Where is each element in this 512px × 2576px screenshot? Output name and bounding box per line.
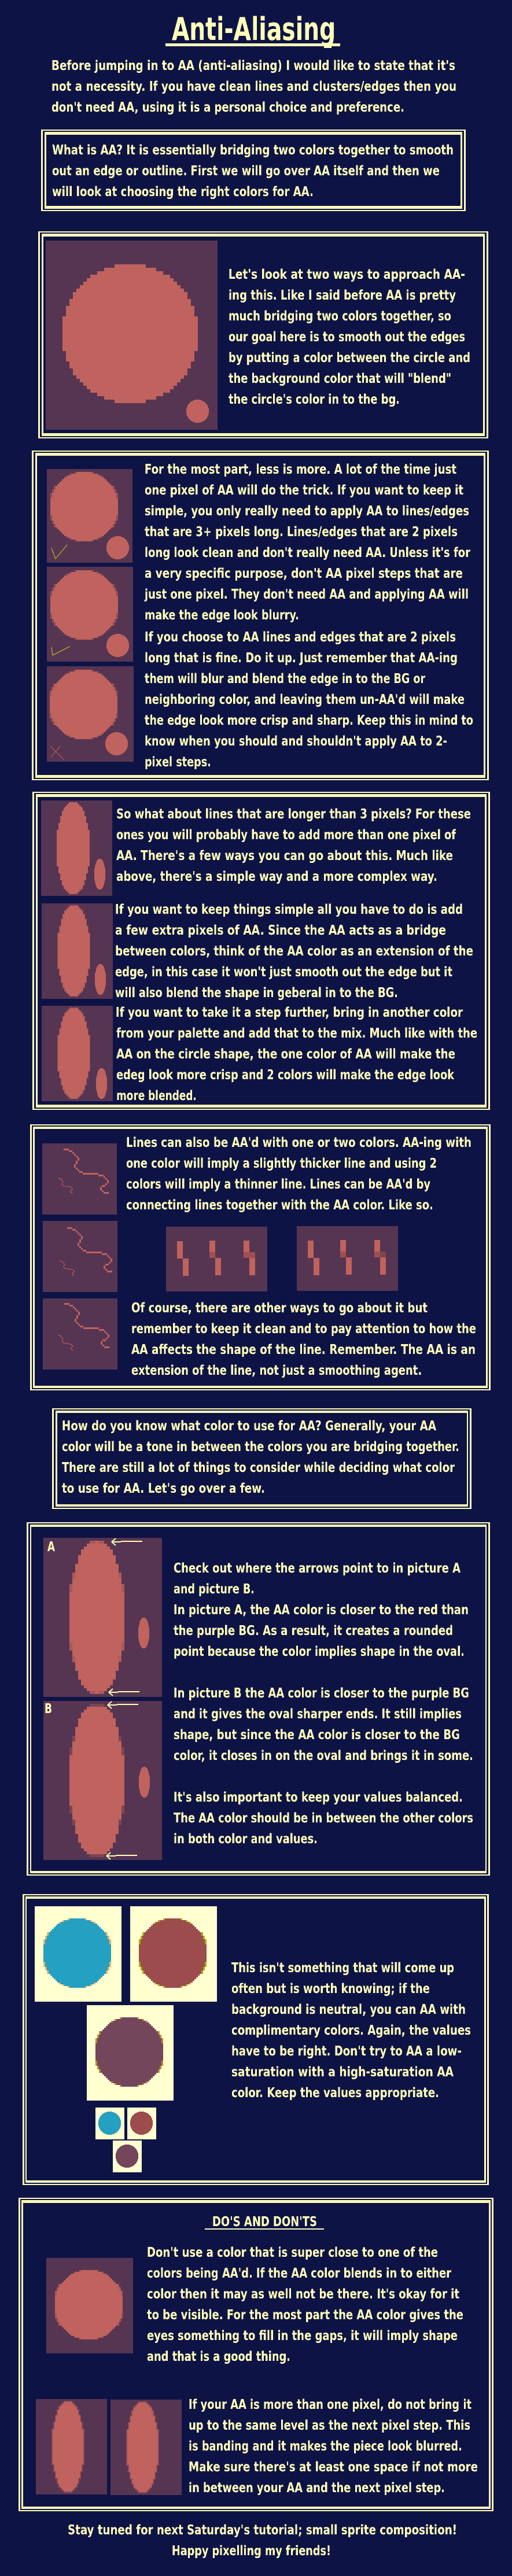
arrow: bottom of oval A bbox=[109, 1689, 139, 1696]
picture: red oval on cream bbox=[130, 1906, 217, 2002]
footer text bbox=[68, 2523, 457, 2559]
picture: AA too close to one color bbox=[46, 2258, 133, 2353]
text: simple approach bbox=[115, 902, 473, 1001]
text: two ways to approach AA: ing this. Like I said before AA is pretty bbox=[229, 288, 456, 303]
panel: lines longer than 3 pixels bbox=[32, 792, 490, 1110]
text: lines with AA bbox=[126, 1135, 472, 1213]
text: picture comparison: and picture B. bbox=[174, 1582, 255, 1597]
picture: squiggle lines with one AA color bbox=[43, 1221, 117, 1292]
text: complementary colors: saturation with a high-saturation AA bbox=[231, 2065, 454, 2080]
panel: choosing AA color bbox=[52, 1408, 472, 1509]
panel: two ways to approach AA bbox=[38, 231, 488, 438]
panel: what is AA bbox=[41, 130, 466, 211]
text: longer lines bbox=[116, 807, 471, 884]
text: simple approach: a few extra pixels of AA. Since the AA acts as a bridge bbox=[115, 923, 446, 938]
picture: teal oval on cream bbox=[35, 1906, 121, 2002]
mini sprite: plum bbox=[113, 2140, 142, 2172]
panel: AA on lines bbox=[30, 1124, 491, 1390]
picture B: AA closer to purple bbox=[43, 1701, 162, 1860]
text: banding: in between your AA and the next pixel step. bbox=[189, 2481, 445, 2496]
text: complementary colors: often but is worth knowing; if the bbox=[231, 1981, 430, 1996]
intro text bbox=[51, 58, 456, 115]
text: choosing AA color bbox=[62, 1419, 459, 1496]
text: complex approach: more blended. bbox=[116, 1088, 197, 1104]
picture: banded AA oval right bbox=[110, 2400, 182, 2495]
picture: large circle and small sprite bbox=[46, 241, 218, 430]
picture: stepped bars with one AA color bbox=[166, 1227, 267, 1291]
text: AA color choice: and that is a good thing. bbox=[147, 2349, 290, 2364]
heading: do's and don'ts: DO'S AND DON'TS bbox=[212, 2215, 317, 2230]
text: AA color choice bbox=[147, 2245, 463, 2364]
text: AA color choice: Don't use a color that is super close to one of the bbox=[147, 2245, 438, 2260]
text: choosing AA color: to use for AA. Let's go over a few. bbox=[62, 1481, 265, 1496]
text: two ways to approach AA: much bridging two colors together, so bbox=[229, 309, 451, 324]
picture A: AA closer to red bbox=[43, 1538, 162, 1697]
arrow: top of oval B bbox=[108, 1702, 138, 1708]
text: two ways to approach AA bbox=[229, 267, 470, 407]
text: less is more bbox=[144, 462, 473, 770]
text: complex approach bbox=[116, 1005, 477, 1104]
picture: bad AA with cross mark bbox=[47, 666, 134, 762]
picture: stepped bars with two AA colors bbox=[297, 1226, 398, 1291]
label: B: B bbox=[45, 1702, 52, 1717]
text: longer lines: above, there's a simple way and a more complex way. bbox=[116, 869, 437, 884]
picture: squiggle lines with two AA colors bbox=[43, 1298, 117, 1370]
arrow: bottom of oval B bbox=[106, 1852, 137, 1859]
arrow: top of oval A bbox=[112, 1538, 142, 1545]
mini sprite: red bbox=[127, 2108, 156, 2139]
picture: squiggle lines without AA bbox=[42, 1143, 117, 1215]
picture: good AA with second check mark bbox=[47, 567, 133, 662]
text: other ways: Of course, there are other ways to go about it but bbox=[131, 1301, 428, 1316]
text: complementary colors: color. Keep the values appropriate. bbox=[231, 2086, 439, 2101]
text: two ways to approach AA: the circle's color in to the bg. bbox=[229, 392, 400, 407]
text: picture comparison bbox=[174, 1561, 473, 1847]
text: less is more: pixel steps. bbox=[145, 755, 211, 770]
text: other ways bbox=[131, 1301, 476, 1378]
panel: do's and don'ts bbox=[19, 2198, 493, 2511]
text: less is more: make the edge look blurry. bbox=[145, 608, 299, 623]
label: A: A bbox=[47, 1540, 55, 1555]
text: picture comparison: in both color and values. bbox=[174, 1832, 318, 1847]
mini sprite: teal bbox=[95, 2108, 124, 2139]
picture: plum oval on cream bbox=[87, 2005, 174, 2101]
picture: tall oval with two AA colors bbox=[42, 1006, 113, 1101]
panel: picture A and picture B bbox=[27, 1522, 490, 1876]
picture: good AA with check mark bbox=[47, 469, 132, 563]
text: banding bbox=[189, 2397, 478, 2496]
text: lines with AA: connecting lines together with the AA color. Like so. bbox=[126, 1198, 433, 1213]
text: less is more: them will blur and blend the edge in to the BG or bbox=[145, 671, 425, 687]
text: other ways: extension of the line, not just a smoothing agent. bbox=[131, 1363, 422, 1378]
text: lines with AA: colors will imply a thinner line. Lines can be AA'd by bbox=[126, 1177, 430, 1192]
picture: banded AA oval left bbox=[36, 2399, 107, 2494]
panel: less is more bbox=[32, 451, 489, 780]
text: simple approach: will also blend the shape in geberal in to the BG. bbox=[115, 986, 398, 1001]
text: complementary colors: This isn't something that will come up bbox=[231, 1961, 454, 1976]
footer text: Happy pixelling my friends! bbox=[172, 2544, 331, 2559]
panel: complementary colors bbox=[23, 1894, 489, 2185]
text: what is AA: will look at choosing the right colors for AA. bbox=[52, 184, 314, 200]
title: Anti-Aliasing bbox=[172, 11, 336, 47]
picture: tall oval without AA bbox=[41, 800, 112, 896]
text: what is AA bbox=[52, 143, 454, 200]
intro text: don't need AA, using it is a personal choice and preference. bbox=[51, 100, 404, 115]
text: two ways to approach AA: the background color that will "blend" bbox=[229, 371, 451, 386]
text: complementary colors bbox=[231, 1961, 471, 2101]
picture: tall oval with one AA color bbox=[42, 903, 113, 999]
